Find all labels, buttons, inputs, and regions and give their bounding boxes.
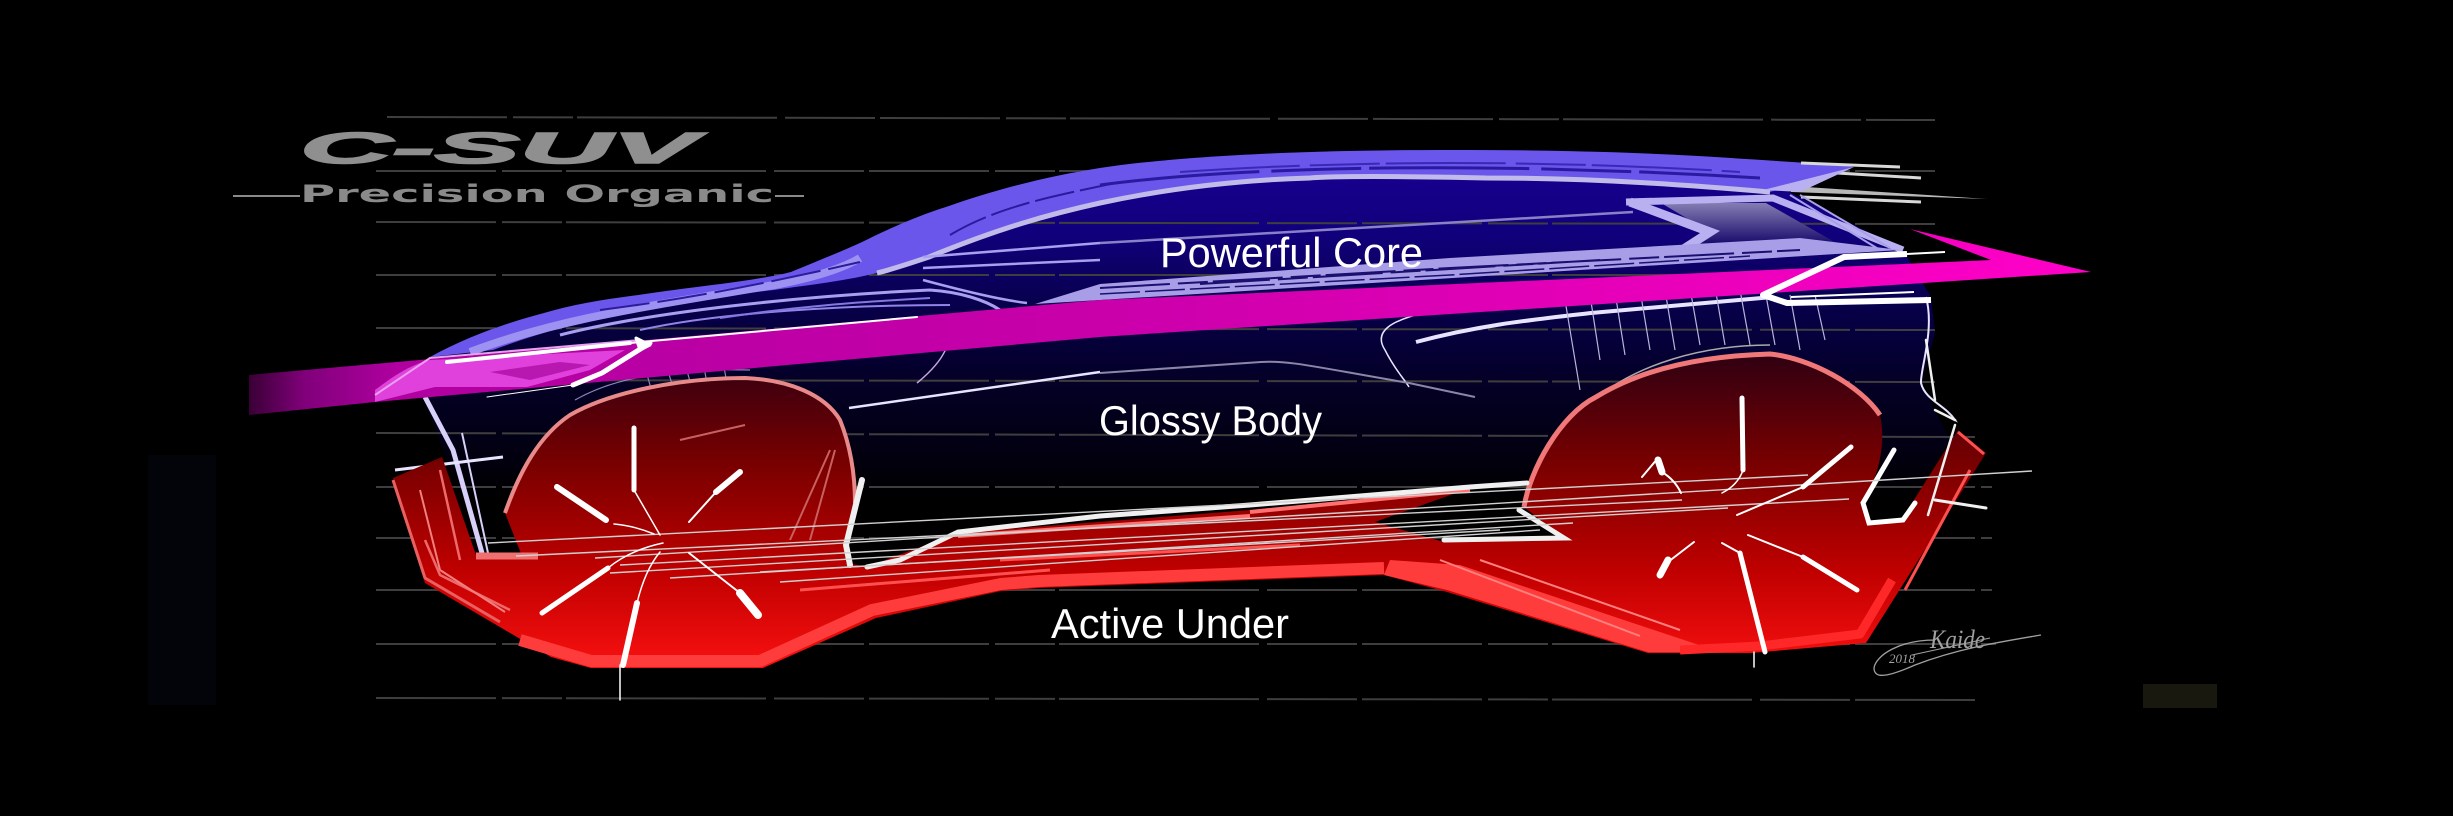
white front chevron [447,317,917,397]
belt line lavender band [1035,238,1900,304]
long thin sketch lines [488,471,2032,582]
white rear chevron [1763,252,1945,303]
rear wheel spokes [1642,398,1857,667]
rear quarter window [1100,195,1903,250]
rear spoiler strokes [1763,163,1987,202]
wheel arch and sill highlights [393,354,1984,661]
active under red body [393,354,1986,668]
front fascia lines [395,397,503,553]
signature: Kaide [1929,625,1985,654]
front fender shape [375,340,640,402]
faint corner panels [148,455,2217,708]
title: C-SUV: C-SUV [300,124,708,173]
roof band [430,150,1854,357]
label: Glossy Body: Glossy Body [1099,397,1322,444]
white sill highlights [846,340,1986,567]
car body dark fill [418,150,1950,553]
signature: 2018 [1889,651,1916,666]
subtitle: Precision Organic: Precision Organic [300,180,774,208]
sketch guide lines [376,117,1996,700]
rear body lines [575,287,1955,420]
magenta shoulder band [249,229,2091,415]
label: Active Under: Active Under [1051,600,1289,647]
front wheel spokes [542,428,758,700]
label: Powerful Core: Powerful Core [1160,229,1423,276]
signature [1874,625,2041,675]
